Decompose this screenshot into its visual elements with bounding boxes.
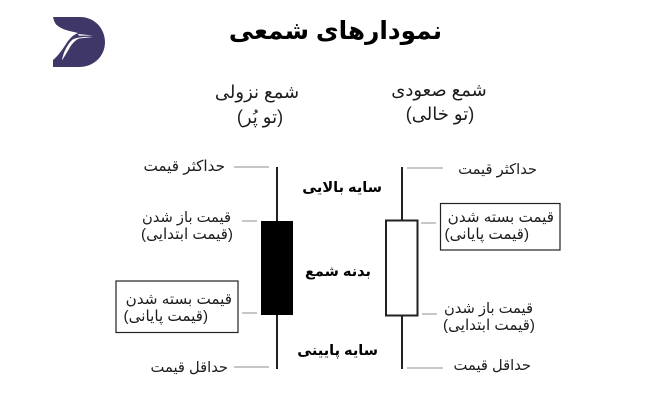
title: نمودارهای شمعی [229,18,442,46]
heading: bullish candle [391,80,487,125]
bearish candlestick [261,167,293,369]
label: bullish low price: حداقل قیمت [454,358,531,374]
callout: bullish close price: (قیمت پایانی) [445,226,529,244]
callout: bearish close price: (قیمت پایانی) [124,308,208,326]
label: bearish open price: قیمت باز شدن [142,210,231,226]
label: lower shadow: سایه پایینی [297,343,378,359]
callout: bearish close price: قیمت بسته شدن [126,291,232,308]
heading: bullish candle: (تو خالی) [406,104,474,125]
heading: bearish candle [215,82,299,128]
label: bullish open price: قیمت باز شدن [444,301,533,317]
callout: bullish close price [440,204,560,250]
callout: bearish close price [116,281,238,332]
label: bearish low price: حداقل قیمت [151,360,228,376]
label: upper shadow: سایه بالایی [302,180,382,196]
callout: bullish close price: قیمت بسته شدن [448,209,554,226]
bullish candlestick [386,167,418,369]
leader ticks [234,167,443,368]
label: bullish open price: (قیمت ابتدایی) [443,317,535,334]
heading: bearish candle: (تو پُر) [237,107,283,128]
heading: bullish candle: شمع صعودی [391,80,487,101]
heading: bearish candle: شمع نزولی [215,82,299,103]
label: bullish high price: حداکثر قیمت [458,162,537,178]
label: candle body: بدنه شمع [305,264,371,280]
label: bullish open price [443,301,535,334]
label: bearish open price [141,210,233,243]
label: bearish open price: (قیمت ابتدایی) [141,226,233,243]
icon: bird logo [53,17,105,67]
label: bearish high price: حداکثر قیمت [143,158,225,175]
